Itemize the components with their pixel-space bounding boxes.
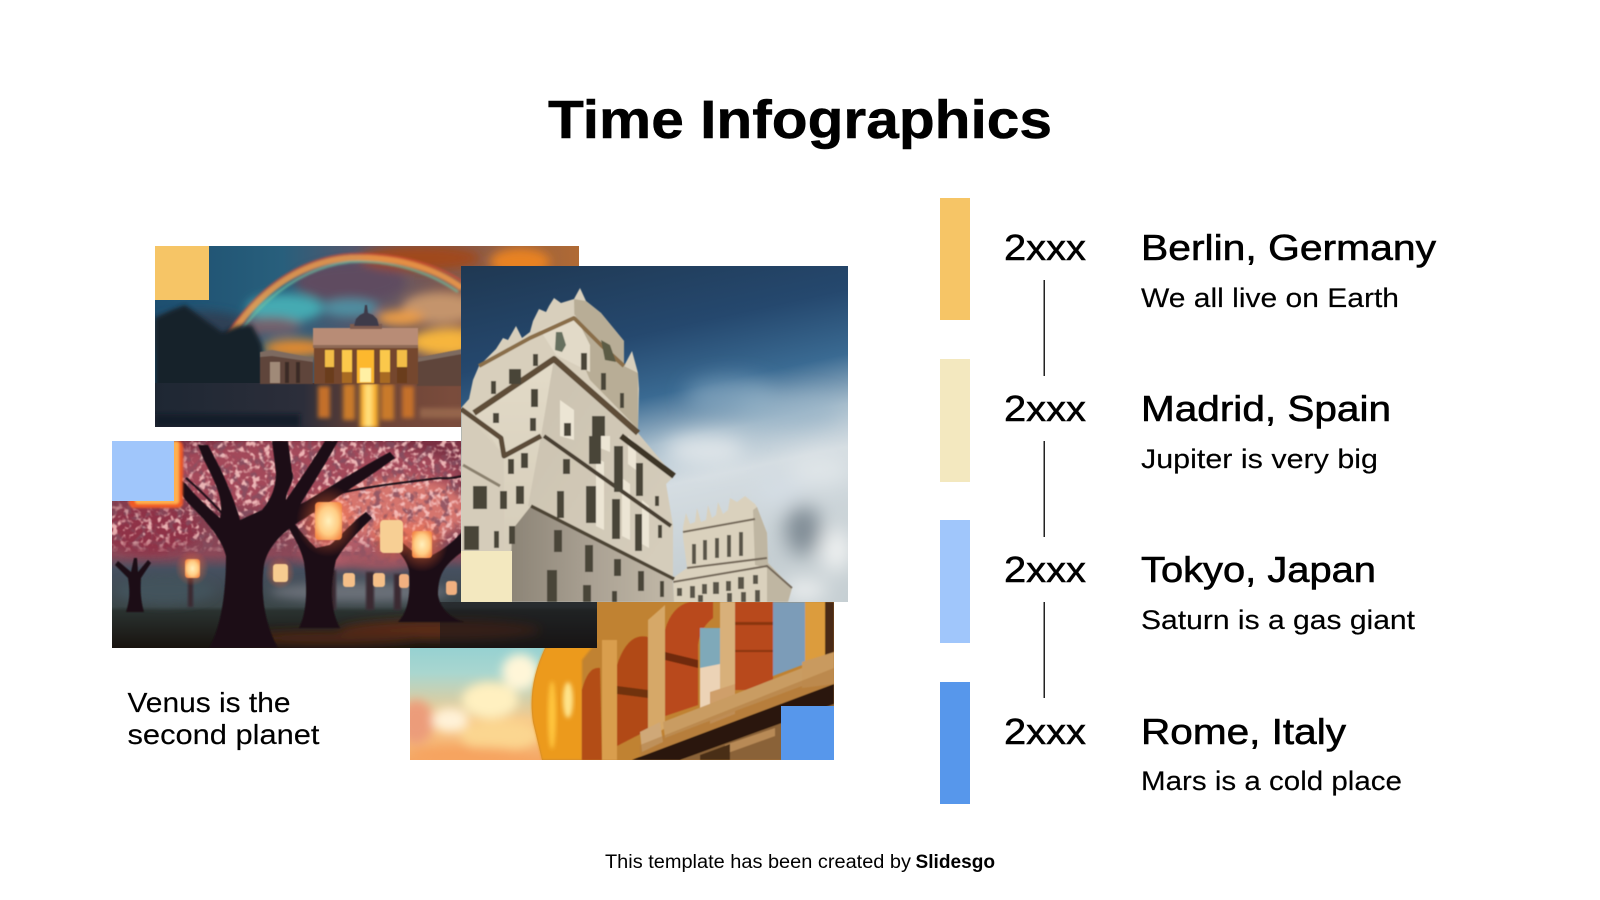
year: 2xxx <box>1004 227 1086 268</box>
photo: baroque towers against the sky <box>461 266 851 602</box>
city: Tokyo, Japan <box>1141 549 1376 590</box>
footer credit: Slidesgo <box>916 852 995 873</box>
photo: cherry trees with lanterns <box>112 441 597 648</box>
left face <box>478 364 552 417</box>
bar: cream <box>940 359 970 482</box>
gate <box>313 305 418 384</box>
bar: light blue <box>940 520 970 643</box>
title: Time Infographics <box>548 90 1052 150</box>
swatch: blue <box>781 706 834 760</box>
blossoms <box>112 441 461 562</box>
year: 2xxx <box>1004 388 1086 429</box>
description: Saturn is a gas giant <box>1141 605 1416 635</box>
icon: rainbow arc <box>227 252 461 333</box>
photo: Berlin gate with rainbow <box>140 245 580 428</box>
sky opening <box>773 602 805 676</box>
city: Berlin, Germany <box>1141 227 1436 268</box>
timeline row: Tokyo <box>940 520 1416 643</box>
building base <box>532 602 834 760</box>
lower face <box>510 506 674 602</box>
dark lower right <box>440 602 597 648</box>
crown shading <box>574 299 638 429</box>
city: Madrid, Spain <box>1141 388 1391 429</box>
photo: Colosseum at sunset <box>398 602 834 763</box>
pale pilasters <box>560 400 649 548</box>
windows upper <box>464 353 664 602</box>
trunks <box>115 441 490 648</box>
windows lower <box>464 526 479 550</box>
swatch: yellow <box>155 246 209 300</box>
year: 2xxx <box>1004 711 1086 752</box>
timeline row: Madrid <box>940 359 1391 482</box>
caption: Venus: second planet <box>128 719 320 750</box>
connector line 2 <box>1044 441 1045 537</box>
cornices <box>461 318 674 579</box>
thin branches <box>185 474 461 514</box>
trees <box>155 305 266 392</box>
windows middle <box>508 459 514 474</box>
description: Jupiter is very big <box>1141 444 1378 474</box>
swatch: cream <box>461 551 512 602</box>
statue <box>555 332 566 352</box>
caption: Venus: Venus is the <box>128 687 290 718</box>
piers <box>602 640 617 760</box>
glowing curved wall <box>532 640 598 760</box>
swatch: light blue <box>112 441 174 501</box>
description: We all live on Earth <box>1141 283 1399 313</box>
timeline row: Rome <box>940 682 1402 804</box>
arches <box>582 602 834 760</box>
description: Mars is a cold place <box>1141 766 1402 796</box>
balustrade <box>663 668 802 738</box>
footer credit: This template has been created by <box>605 852 912 873</box>
far tower <box>673 496 792 602</box>
left wing <box>461 408 504 555</box>
main tower silhouette <box>461 288 674 602</box>
timeline row: Berlin <box>940 198 1436 320</box>
gate wings <box>260 349 462 386</box>
bar: yellow <box>940 198 970 320</box>
right red wall <box>735 602 773 690</box>
dark band <box>632 684 834 760</box>
lantern under swatch <box>129 441 183 508</box>
connector line 1 <box>1044 280 1045 376</box>
bar: blue <box>940 682 970 804</box>
caption: Venus <box>128 687 320 750</box>
stone below <box>680 704 834 760</box>
city: Rome, Italy <box>1141 711 1346 752</box>
lanterns <box>175 485 457 595</box>
distant trunks <box>188 570 401 610</box>
year: 2xxx <box>1004 549 1086 590</box>
connector line 3 <box>1044 602 1045 698</box>
ground <box>155 383 461 427</box>
right face <box>528 359 674 580</box>
